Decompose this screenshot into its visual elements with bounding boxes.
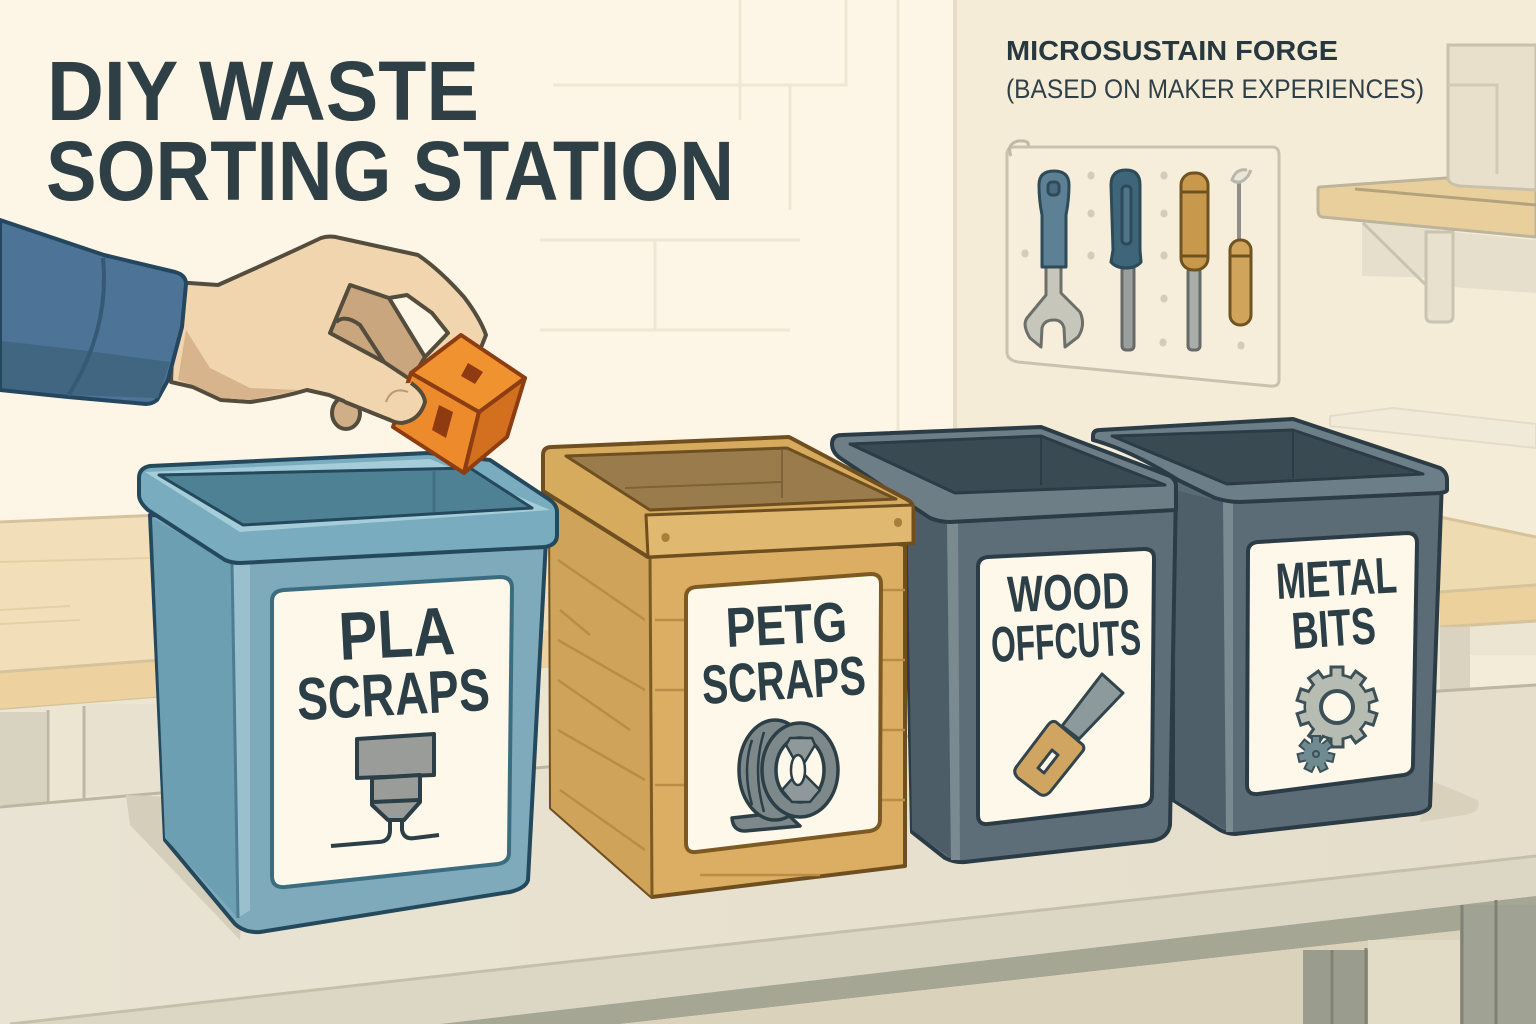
nails xyxy=(666,522,898,538)
attribution text xyxy=(1006,35,1424,104)
icon: chisel xyxy=(1015,674,1123,795)
icon: wrench xyxy=(1025,171,1083,347)
box inner line xyxy=(1448,85,1497,174)
tucked fingers xyxy=(330,285,425,380)
pegboard with tools xyxy=(1007,141,1279,386)
body xyxy=(150,515,546,932)
label: wood offcuts: WOOD xyxy=(1006,562,1130,623)
label: pla scraps: SCRAPS xyxy=(295,656,491,733)
title xyxy=(46,44,734,218)
right wood bench xyxy=(1440,517,1536,627)
rim xyxy=(832,427,1176,522)
bin: pla scraps xyxy=(139,453,557,932)
bin: metal bits xyxy=(1093,419,1447,834)
hand with sleeve xyxy=(0,220,486,429)
body xyxy=(1173,480,1442,834)
hand xyxy=(171,236,486,423)
thumb over cube xyxy=(345,383,425,423)
cube hole top xyxy=(461,363,483,384)
rim xyxy=(139,453,557,563)
label: metal bits xyxy=(1247,533,1417,794)
bracket stem xyxy=(1426,232,1453,322)
workbench counter xyxy=(0,685,1536,1024)
shelf top edge xyxy=(1355,189,1536,205)
body xyxy=(550,490,905,897)
left wood bench xyxy=(0,505,550,710)
wall box xyxy=(1448,45,1536,190)
icon: yellow screwdriver xyxy=(1181,173,1208,350)
bin: wood offcuts xyxy=(832,427,1176,862)
shelf bracket xyxy=(1363,223,1428,287)
label: wood offcuts xyxy=(978,549,1154,824)
attribution text: (BASED ON MAKER EXPERIENCES) xyxy=(1006,74,1424,104)
title: SORTING STATION xyxy=(46,124,734,218)
label: petg scraps: PETG xyxy=(724,590,848,659)
opening xyxy=(159,468,532,525)
label: petg scraps xyxy=(686,574,881,852)
label: wood offcuts: OFFCUTS xyxy=(990,609,1142,673)
cuff line xyxy=(68,258,104,396)
lower faint shelf xyxy=(1330,408,1536,448)
little finger xyxy=(332,397,360,429)
bin shadows xyxy=(126,795,250,940)
cube left face xyxy=(393,373,479,473)
icon: 3d printer nozzle xyxy=(331,734,439,846)
icon: small hook tool xyxy=(1230,170,1251,325)
icon: small gear xyxy=(1298,736,1334,772)
orange cube xyxy=(393,335,525,473)
title: DIY WASTE xyxy=(47,44,479,138)
cube top face xyxy=(411,335,525,412)
icon: large gear xyxy=(1297,667,1377,747)
opening xyxy=(1112,430,1423,484)
rim highlight xyxy=(145,459,550,532)
sleeve shadow xyxy=(2,341,170,398)
tile band xyxy=(0,585,1536,810)
finger crease xyxy=(336,319,384,362)
wall shelf xyxy=(1318,178,1536,237)
icon: filament spool xyxy=(732,720,838,831)
opening xyxy=(566,448,896,510)
bin: petg scraps xyxy=(543,437,913,897)
icon: blue screwdriver xyxy=(1111,170,1141,350)
bracket shadow xyxy=(1362,223,1536,293)
sleeve xyxy=(0,220,186,404)
finger gap xyxy=(389,295,448,357)
body xyxy=(905,490,1176,862)
rim xyxy=(543,437,913,557)
rim xyxy=(1093,419,1447,502)
label: pla scraps xyxy=(272,577,512,887)
label: petg scraps: SCRAPS xyxy=(700,644,867,716)
label: metal bits: BITS xyxy=(1290,597,1378,661)
label: metal bits: METAL xyxy=(1274,546,1398,610)
cube right face xyxy=(464,378,525,473)
rim front xyxy=(646,505,913,557)
label: pla scraps: PLA xyxy=(337,593,457,675)
opening xyxy=(850,436,1165,493)
wood grain xyxy=(558,560,905,875)
palm shading xyxy=(178,330,300,400)
cube hole side xyxy=(432,405,453,438)
attribution text: MICROSUSTAIN FORGE xyxy=(1006,35,1338,66)
